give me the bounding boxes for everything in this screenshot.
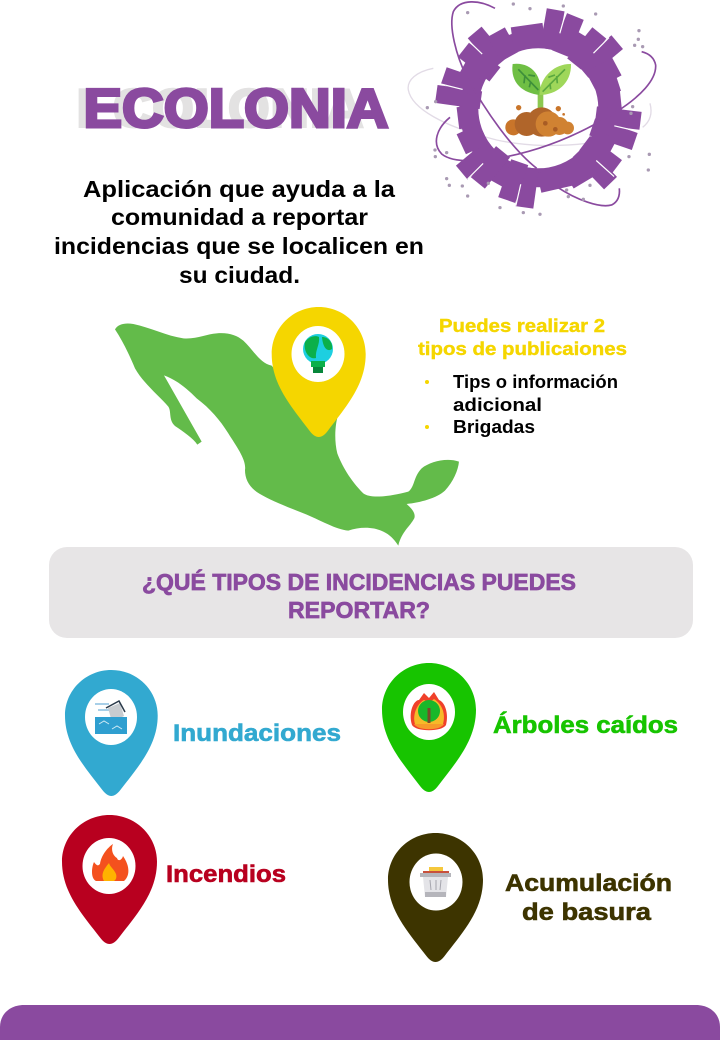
- text block: description: comunidad a reportar: [111, 204, 368, 230]
- orbit lines back: [408, 2, 656, 206]
- label: Acumulación de basura: de basura: [522, 899, 652, 926]
- bullet list: Brigadas: [453, 416, 535, 437]
- icon: trash can: [420, 867, 451, 897]
- heading: publication types: [418, 316, 627, 359]
- text block: description: Aplicación que ayuda a la: [83, 176, 396, 202]
- label: Acumulación de basura: [505, 870, 672, 926]
- footer bar: [0, 1005, 720, 1040]
- map of Mexico: [115, 324, 459, 546]
- plant in soil: [505, 64, 574, 137]
- text block: publication types: [418, 316, 627, 437]
- orbit lines front: [467, 77, 617, 168]
- icon: burning tree: [411, 692, 447, 730]
- text block: description: [54, 176, 424, 288]
- label: Acumulación de basura: Acumulación: [505, 870, 672, 897]
- heading: publication types: Puedes realizar 2: [439, 316, 605, 336]
- emblem: city ring with plant: [408, 2, 656, 216]
- city skyline ring: [435, 8, 642, 209]
- label: Incendios: Incendios: [166, 861, 286, 888]
- incident: fallen trees: [382, 663, 678, 792]
- label: Inundaciones: Inundaciones: [173, 720, 341, 747]
- incident: floods: [65, 670, 341, 796]
- incident: fires: [62, 815, 286, 944]
- label: Árboles caídos: Árboles caídos: [493, 711, 678, 739]
- icon: globe light bulb: [303, 334, 333, 373]
- heading: incident types: ¿QUÉ TIPOS DE INCIDENCIAS PUEDES: [142, 568, 576, 595]
- scattered dots: [426, 2, 651, 216]
- bullet list: [425, 371, 618, 437]
- pin: yellow with globe bulb: [272, 307, 366, 437]
- bullet list: adicional: [453, 394, 542, 415]
- text block: description: su ciudad.: [179, 262, 300, 288]
- icon: flame: [92, 844, 128, 881]
- title: ECOLONIA: ECOLONIA: [84, 77, 389, 139]
- heading: incident types: [142, 568, 576, 623]
- heading: publication types: tipos de publicaiones: [418, 339, 627, 359]
- heading: incident types: REPORTAR?: [288, 597, 430, 623]
- building separators: [439, 12, 638, 206]
- incident: garbage: [388, 833, 672, 962]
- bullet list: Tips o información: [453, 371, 618, 392]
- title: ECOLONIA: ECOLONIA: [76, 77, 364, 139]
- text block: description: incidencias que se localicen en: [54, 233, 424, 259]
- panel: question banner: [49, 547, 693, 638]
- icon: flooded house: [95, 701, 127, 734]
